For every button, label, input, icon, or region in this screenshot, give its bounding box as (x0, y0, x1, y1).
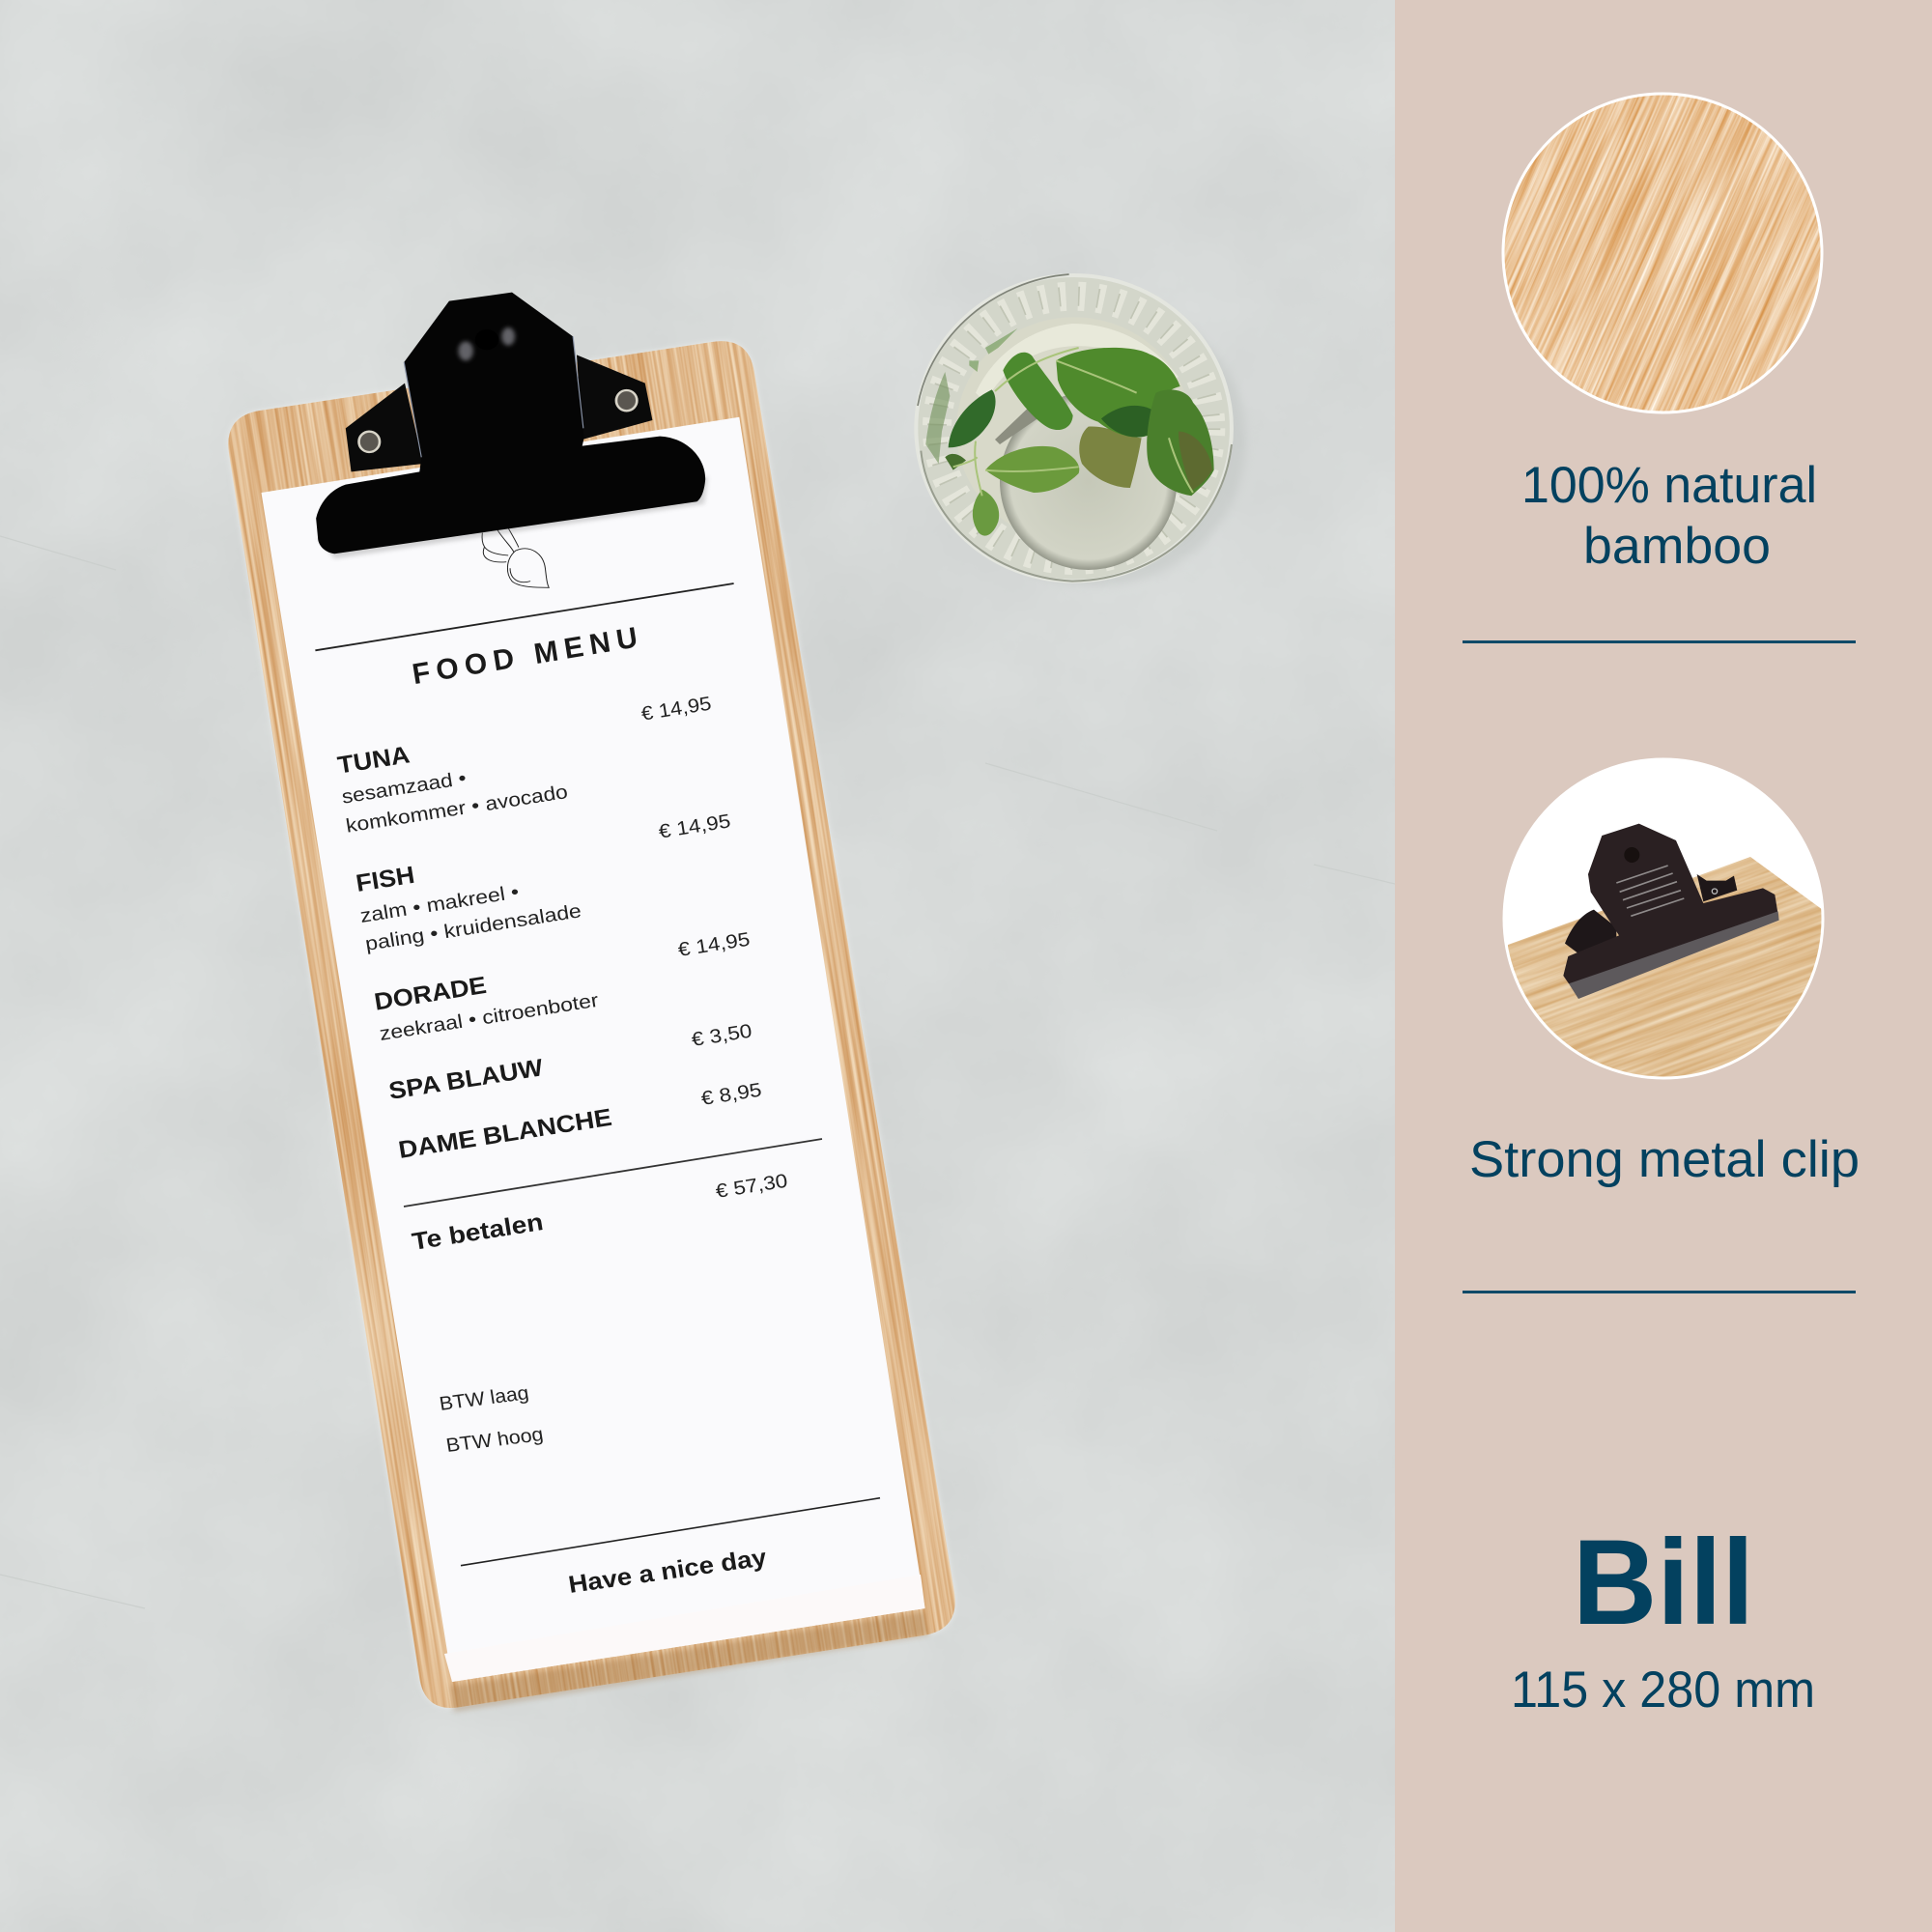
menu item: tuna: komkommer • avocado (345, 781, 569, 838)
clip in circle (1563, 824, 1779, 999)
total row (411, 1171, 789, 1256)
mint leaves (945, 348, 1214, 536)
menu item: tuna: € 14,95 (639, 694, 713, 725)
text: 100% natural bamboo: 100% natural (1521, 457, 1817, 514)
footer message: Have a nice day (567, 1544, 769, 1599)
text: 100% natural bamboo: bamboo (1583, 518, 1771, 575)
menu item: fish: € 14,95 (657, 810, 732, 843)
photo: bamboo texture circle (1501, 93, 1824, 413)
bamboo clipboard (228, 292, 955, 1714)
product name: Bill (1573, 1516, 1754, 1650)
glass with mint leaves (915, 273, 1246, 586)
vat rows: BTW hoog (444, 1424, 545, 1457)
total row: Te betalen (411, 1208, 545, 1256)
menu item: tuna: sesamzaad • (340, 768, 468, 809)
eyelets (359, 390, 637, 452)
menu item: dorade (373, 929, 752, 1045)
glass base (1000, 393, 1177, 570)
menu item: dorade: zeekraal • citroenboter (378, 990, 600, 1045)
total row: € 57,30 (714, 1171, 789, 1203)
menu item: spa blauw: € 3,50 (690, 1020, 753, 1051)
menu item: fish: FISH (355, 862, 416, 897)
menu item: dorade: DORADE (373, 972, 489, 1016)
vat rows: BTW laag (438, 1382, 530, 1415)
dimensions: 115 x 280 mm (1511, 1662, 1815, 1719)
menu item: dorade: € 14,95 (676, 929, 752, 961)
vat rows (438, 1382, 545, 1457)
menu item: fish: zalm • makreel • (358, 881, 521, 927)
menu item: spa blauw: SPA BLAUW (387, 1054, 545, 1105)
menu title: FOOD MENU (410, 622, 639, 691)
clip body (316, 293, 705, 554)
menu paper (261, 417, 925, 1682)
text: strong metal clip: Strong metal clip (1469, 1131, 1860, 1188)
menu item: dame blanche (397, 1079, 763, 1164)
wood board in circle (1508, 857, 1822, 1076)
right panel (1356, 0, 1932, 1932)
side reflections (925, 372, 950, 464)
menu item: fish: paling • kruidensalade (364, 900, 582, 955)
glass ridges (937, 297, 1210, 560)
black metal clip (316, 293, 708, 558)
radish icon (482, 528, 549, 587)
board shadow (228, 341, 955, 1708)
menu item: fish (355, 810, 732, 955)
clip wings (346, 355, 652, 471)
menu item: tuna (336, 694, 713, 838)
board wood (228, 341, 955, 1708)
text: 100% natural bamboo (1521, 457, 1817, 575)
menu item: tuna: TUNA (336, 741, 412, 780)
concrete background (0, 0, 1395, 1932)
menu item: dame blanche: DAME BLANCHE (397, 1104, 613, 1164)
menu item: spa blauw (387, 1020, 753, 1105)
clip shadow (318, 476, 708, 558)
photo: metal clip circle (1503, 757, 1824, 1080)
paper shadow (450, 1611, 929, 1712)
menu item: dame blanche: € 8,95 (699, 1079, 763, 1110)
clip pin highlights (458, 327, 515, 360)
